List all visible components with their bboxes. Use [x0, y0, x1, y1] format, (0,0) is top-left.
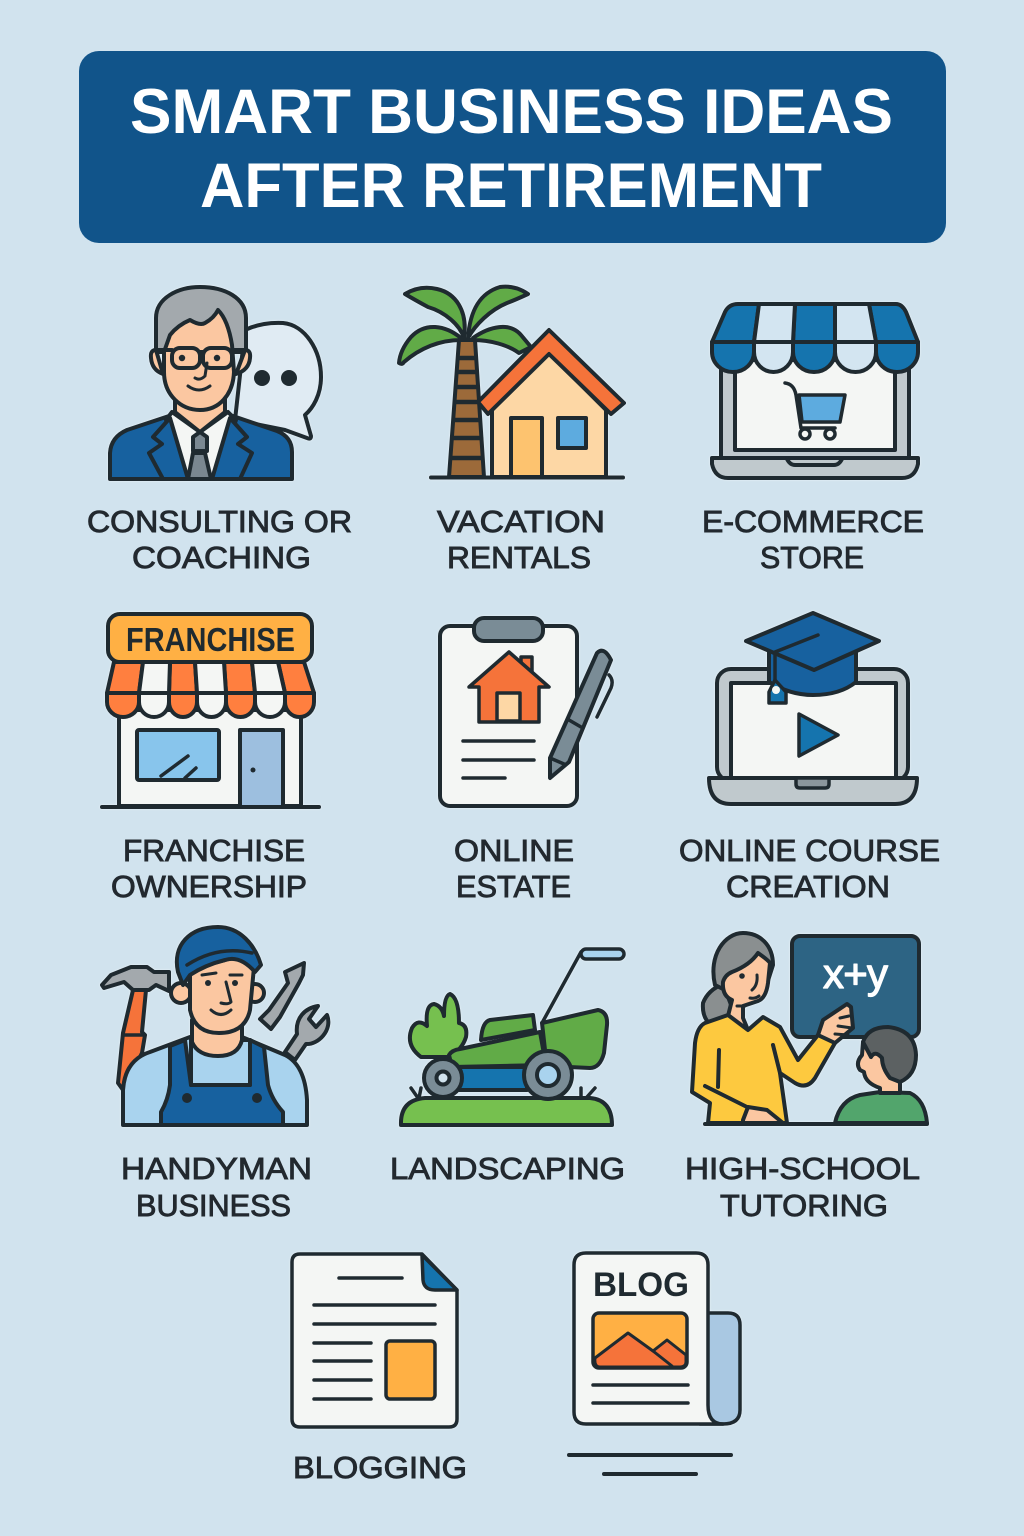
panel: handyman business — [102, 927, 328, 1223]
label: e-commerce store: E-COMMERCE — [702, 504, 924, 539]
icon: franchise shop — [102, 614, 319, 807]
label: e-commerce store: STORE — [760, 540, 864, 575]
icon: teacher and student at board: x+y — [823, 950, 888, 997]
panel: blog page — [569, 1253, 740, 1474]
sign text: franchise: FRANCHISE — [126, 621, 295, 658]
icon: document with fold — [292, 1254, 457, 1427]
label: e-commerce store — [702, 504, 924, 575]
panel: vacation rentals — [399, 287, 624, 575]
panel: consulting or coaching — [87, 287, 352, 575]
icon: blog newspaper — [574, 1253, 740, 1424]
title banner: SMART BUSINESS IDEAS — [130, 77, 893, 147]
label: online estate: ONLINE — [454, 833, 574, 868]
label: online estate: ESTATE — [456, 869, 571, 904]
panel: online course creation — [679, 613, 940, 904]
icon: lawn mower — [401, 949, 624, 1125]
panel: online estate — [440, 618, 612, 904]
icon: teacher and student at board — [692, 933, 927, 1124]
label: consulting or coaching: CONSULTING OR — [87, 504, 352, 539]
label: online estate — [454, 833, 574, 904]
label: vacation rentals — [437, 504, 605, 575]
label: franchise ownership — [111, 833, 307, 904]
icon: clipboard with house and pen — [440, 618, 612, 806]
label: vacation rentals: VACATION — [437, 504, 605, 539]
label: vacation rentals: RENTALS — [447, 540, 591, 575]
label: high-school tutoring — [685, 1151, 920, 1223]
label: online course creation: ONLINE COURSE — [679, 833, 940, 868]
icon: palm tree and house — [399, 287, 624, 478]
panel: high-school tutoring — [685, 933, 927, 1223]
icon: consultant with speech bubble — [110, 287, 321, 479]
label: online course creation — [679, 833, 940, 904]
label: consulting or coaching: COACHING — [132, 540, 311, 575]
panel: landscaping — [390, 949, 625, 1186]
label: consulting or coaching — [87, 504, 352, 575]
label: high-school tutoring: TUTORING — [720, 1188, 888, 1223]
icon: handyman with tools — [102, 927, 328, 1125]
label: franchise ownership: FRANCHISE — [123, 833, 305, 868]
placeholder caption lines — [569, 1455, 731, 1474]
label: franchise ownership: OWNERSHIP — [111, 869, 307, 904]
label: landscaping: LANDSCAPING — [390, 1151, 625, 1186]
label: handyman business — [121, 1151, 312, 1223]
panel: e-commerce store — [702, 304, 924, 575]
label: blogging: BLOGGING — [293, 1450, 467, 1485]
panel: blogging — [292, 1254, 467, 1485]
title banner: AFTER RETIREMENT — [200, 151, 822, 221]
blog heading text: BLOG — [593, 1266, 689, 1304]
icon: laptop with graduation cap — [709, 613, 917, 804]
label: online course creation: CREATION — [726, 869, 890, 904]
label: handyman business: BUSINESS — [136, 1188, 291, 1223]
label: high-school tutoring: HIGH-SCHOOL — [685, 1151, 920, 1186]
panel: franchise ownership — [102, 614, 319, 904]
title banner — [79, 51, 946, 243]
label: handyman business: HANDYMAN — [121, 1151, 312, 1186]
icon: laptop storefront with cart — [712, 304, 918, 478]
